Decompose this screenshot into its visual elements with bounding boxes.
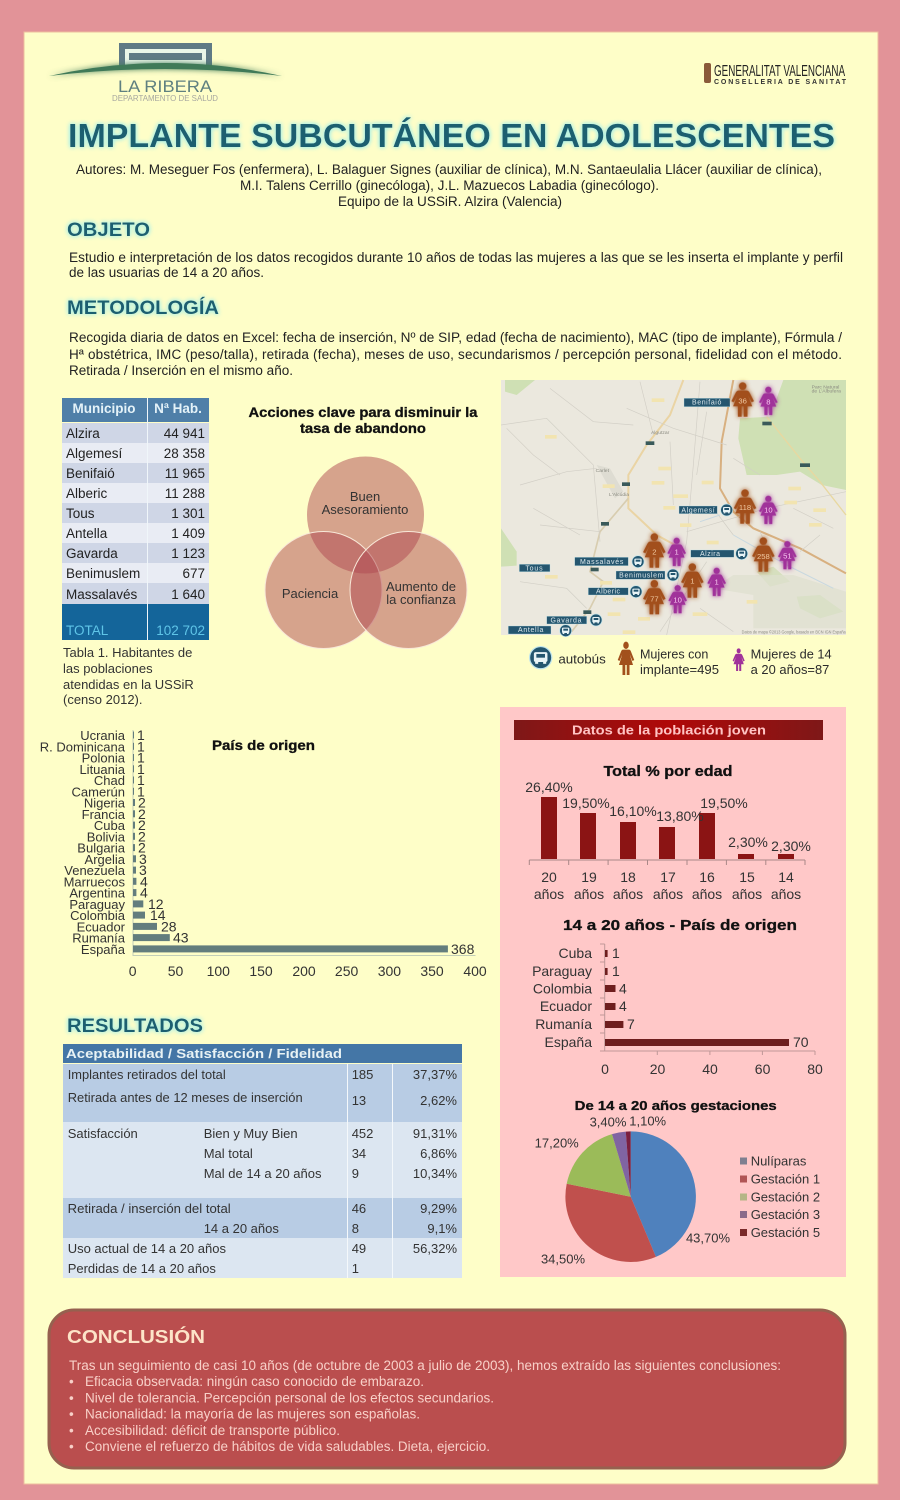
table: resultados: 46 xyxy=(352,1201,366,1216)
country labels: Ucrania xyxy=(80,728,126,743)
value labels: 1 xyxy=(137,750,145,766)
country labels: Marruecos xyxy=(64,874,125,889)
country labels: Bolivia xyxy=(87,829,126,844)
pie legend xyxy=(740,1154,820,1240)
chart: 14 a 20 años país de origen: 80 xyxy=(807,1061,823,1077)
country labels: España xyxy=(81,942,126,957)
venn diagram: Paciencia xyxy=(282,586,339,601)
x axis labels: 300 xyxy=(378,963,401,979)
map: Parc Natural xyxy=(812,384,839,390)
table: municipios: Benimuslem xyxy=(66,566,140,581)
country labels: Nigeria xyxy=(84,796,126,810)
venn diagram xyxy=(265,456,467,648)
chart: 14 a 20 años país de origen: 4 xyxy=(619,980,627,996)
country labels: Argentina xyxy=(69,886,126,901)
table: resultados: 6,86% xyxy=(420,1146,457,1161)
map: Benimuslem xyxy=(619,572,664,579)
icon: bus xyxy=(530,647,552,669)
logo: La Ribera xyxy=(49,43,282,103)
table caption: atendidas en la USSiR xyxy=(63,677,194,692)
chart: total por edad xyxy=(525,764,811,902)
chart: 14 a 20 años país de origen: 1 xyxy=(612,963,620,979)
chart: 14 a 20 años país de origen: 40 xyxy=(702,1061,718,1077)
text: objeto: de las usuarias de 14 a 20 años. xyxy=(69,265,264,280)
country labels: Francia xyxy=(82,807,126,822)
conclusion text xyxy=(69,1358,781,1454)
chart: total por edad: 2,30% xyxy=(771,838,811,854)
panel header xyxy=(514,720,823,740)
table: resultados: Uso actual de 14 a 20 años xyxy=(68,1241,226,1256)
panel header: Datos de la población joven xyxy=(572,722,766,738)
conclusion text: • xyxy=(69,1406,74,1422)
logo: La Ribera: DEPARTAMENTO DE SALUD xyxy=(112,94,218,103)
chart: gestaciones pie xyxy=(535,1098,820,1266)
table: municipios: 1 409 xyxy=(171,526,205,541)
chart: total por edad: 17 xyxy=(660,869,676,885)
map: 1 xyxy=(675,548,679,557)
table: resultados: 13 xyxy=(352,1093,366,1108)
map: Datos de mapa ©2013 Google, basado en BCN IGN España xyxy=(742,628,846,635)
chart: 14 a 20 años país de origen: 7 xyxy=(627,1016,635,1032)
chart: 14 a 20 años país de origen: España xyxy=(545,1034,592,1050)
logo: La Ribera: LA RIBERA xyxy=(118,77,213,96)
map: Carlet xyxy=(596,468,610,474)
icon: woman 14 to 20 xyxy=(733,648,745,671)
table: resultados: 2,62% xyxy=(420,1093,457,1108)
country labels: Polonia xyxy=(82,750,126,766)
conclusion text: Tras un seguimiento de casi 10 años (de octubre de 2003 a julio de 2003), hemos extraído las siguientes conclusiones: xyxy=(69,1358,781,1373)
chart: total por edad: 20 xyxy=(541,869,557,885)
authors: Autores: M. Meseguer Fos (enfermera), L. Balaguer Signes (auxiliar de clínica), M.N. Santaeulalia Llácer (auxiliar de clínica), xyxy=(76,162,822,177)
chart: 14 a 20 años país de origen: Cuba xyxy=(559,945,592,961)
map: 1 xyxy=(715,578,719,587)
map: 10 xyxy=(673,595,682,604)
table: resultados: 1 xyxy=(352,1261,359,1276)
text: metodología xyxy=(69,330,842,378)
conclusion text: Eficacia observada: ningún caso conocido de embarazo. xyxy=(85,1374,424,1389)
chart: total por edad: 19,50% xyxy=(562,795,610,811)
map: 10 xyxy=(764,505,773,514)
value labels: 2 xyxy=(138,794,146,810)
value labels: 3 xyxy=(139,851,147,867)
chart: total por edad: años xyxy=(574,886,604,902)
table: municipios: Nª Hab. xyxy=(154,401,202,416)
value labels: 4 xyxy=(140,873,148,889)
table: municipios: 44 941 xyxy=(164,426,205,441)
table: resultados: Satisfacción xyxy=(68,1126,138,1141)
table: municipios: Antella xyxy=(66,526,108,541)
heading: acciones clave: tasa de abandono xyxy=(300,421,426,436)
table caption: las poblaciones xyxy=(63,661,153,676)
conclusion text: • xyxy=(69,1423,74,1438)
value labels: 2 xyxy=(138,828,146,844)
chart: 14 a 20 años país de origen: Ecuador xyxy=(540,998,592,1014)
table: municipios: 1 123 xyxy=(171,546,205,561)
country labels: Bulgaria xyxy=(77,841,126,856)
venn diagram: Asesoramiento xyxy=(322,502,408,517)
map: 2 xyxy=(652,548,656,557)
conclusion text: • xyxy=(69,1374,74,1389)
table: municipios: 11 288 xyxy=(165,486,205,501)
country labels: Paraguay xyxy=(69,897,125,912)
chart: total por edad: 15 xyxy=(739,869,755,885)
chart: total por edad: Total % por edad xyxy=(604,764,732,780)
heading: objeto: OBJETO xyxy=(67,219,150,241)
x axis labels: 350 xyxy=(420,963,444,979)
table caption: (censo 2012). xyxy=(63,692,142,707)
value labels: 1 xyxy=(137,727,145,743)
chart: total por edad: 16,10% xyxy=(609,803,657,819)
chart: total por edad: 18 xyxy=(620,869,636,885)
chart: total por edad: 16 xyxy=(699,869,715,885)
x axis labels: 0 xyxy=(129,963,137,979)
chart: total por edad: 19 xyxy=(581,869,597,885)
country labels: R. Dominicana xyxy=(40,739,126,754)
map: Algutzar xyxy=(651,430,670,436)
value labels: 1 xyxy=(137,761,145,777)
chart: 14 a 20 años país de origen: 60 xyxy=(755,1061,771,1077)
value labels: 1 xyxy=(137,772,145,788)
conclusion text: Nacionalidad: la mayoría de las mujeres son españolas. xyxy=(85,1406,420,1422)
chart: total por edad: 2,30% xyxy=(728,834,768,850)
icon: woman with implant xyxy=(618,642,634,675)
text: metodología: Hª obstétrica, IMC (peso/talla), retirada (fecha), meses de uso, secundarismos / percepción personal, fidelidad con el método. xyxy=(69,347,842,362)
x axis labels: 200 xyxy=(292,963,316,979)
x axis labels: 100 xyxy=(207,963,230,979)
chart: país de origen xyxy=(40,727,487,979)
map xyxy=(501,380,846,637)
chart: 14 a 20 años país de origen xyxy=(532,917,823,1077)
chart: 14 a 20 años país de origen: 70 xyxy=(793,1034,809,1050)
chart: 14 a 20 años país de origen: Rumanía xyxy=(535,1016,592,1032)
table: resultados: 91,31% xyxy=(413,1126,457,1141)
chart: total por edad: años xyxy=(771,886,801,902)
chart: 14 a 20 años país de origen: Colombia xyxy=(533,980,592,996)
table: resultados: 185 xyxy=(352,1067,373,1082)
map: de L'Albufera xyxy=(812,388,841,394)
table caption xyxy=(63,645,194,707)
table: resultados: Bien y Muy Bien xyxy=(204,1126,298,1141)
pie legend: Gestación 5 xyxy=(751,1225,820,1240)
table: municipios: Alberic xyxy=(66,486,108,501)
map: 77 xyxy=(650,594,659,603)
bars xyxy=(133,732,448,952)
map: Algemesí xyxy=(681,507,715,514)
value labels: 14 xyxy=(150,907,166,923)
value labels: 12 xyxy=(148,896,164,912)
map: Massalavés xyxy=(580,559,624,566)
chart: total por edad: 14 xyxy=(778,869,794,885)
table: resultados: Retirada / inserción del total xyxy=(68,1201,231,1216)
country labels xyxy=(40,728,126,957)
chart: 14 a 20 años país de origen: 14 a 20 años - País de origen xyxy=(563,917,797,934)
map legend xyxy=(530,642,832,677)
table: resultados: 9,1% xyxy=(427,1221,457,1236)
text: objeto xyxy=(69,250,843,280)
table: resultados: 49 xyxy=(352,1241,366,1256)
chart: 14 a 20 años país de origen: 0 xyxy=(601,1061,609,1077)
conclusion text: Nivel de tolerancia. Percepción personal de los efectos secundarios. xyxy=(85,1390,494,1406)
map: 1 xyxy=(690,577,694,586)
table: resultados: 56,32% xyxy=(413,1241,457,1256)
chart: total por edad: 19,50% xyxy=(700,795,748,811)
value labels: 1 xyxy=(137,738,145,754)
table: resultados: Mal de 14 a 20 años xyxy=(204,1166,322,1181)
chart: total por edad: años xyxy=(732,886,762,902)
table: municipios: Gavarda xyxy=(66,546,118,561)
chart: gestaciones pie: 43,70% xyxy=(686,1230,730,1246)
table: municipios: Massalavés xyxy=(66,587,138,602)
table: resultados: 9,29% xyxy=(420,1201,457,1216)
value labels: 2 xyxy=(138,806,146,822)
country labels: Chad xyxy=(94,773,125,788)
map legend: implante=495 xyxy=(640,662,719,677)
panel: datos de la población joven xyxy=(500,707,846,1277)
table: resultados: Aceptabilidad / Satisfacción / Fidelidad xyxy=(66,1046,342,1061)
table: municipios: 11 965 xyxy=(165,466,205,481)
map: Alberic xyxy=(596,589,620,596)
chart: total por edad: 26,40% xyxy=(525,779,573,795)
table: resultados: 14 a 20 años xyxy=(204,1221,279,1236)
table: municipios: Algemesí xyxy=(66,446,123,461)
heading: acciones clave: Acciones clave para disminuir la xyxy=(248,405,478,420)
map: 118 xyxy=(739,503,751,512)
country labels: Rumanía xyxy=(72,931,126,946)
pie legend: Gestación 3 xyxy=(751,1207,820,1222)
conclusion text: Conviene el refuerzo de hábitos de vida saludables. Dieta, ejercicio. xyxy=(85,1439,490,1454)
pie legend: Gestación 2 xyxy=(751,1190,820,1204)
authors xyxy=(76,162,822,209)
value labels xyxy=(137,727,475,957)
value labels: 1 xyxy=(137,783,145,799)
chart: gestaciones pie: 17,20% xyxy=(535,1136,579,1150)
chart: total por edad: 13,80% xyxy=(656,808,704,824)
map: 36 xyxy=(738,396,747,405)
table: municipios: 677 xyxy=(182,566,205,581)
country labels: Argelia xyxy=(85,852,126,867)
heading: metodología: METODOLOGÍA xyxy=(67,296,219,319)
venn diagram: Aumento de xyxy=(386,579,456,594)
x axis labels: 400 xyxy=(463,963,487,979)
venn diagram: la confianza xyxy=(386,592,456,607)
x axis labels: 50 xyxy=(168,963,183,979)
map: 258 xyxy=(757,552,770,561)
country labels: Colombia xyxy=(70,908,126,923)
country labels: Venezuela xyxy=(64,863,126,878)
chart: total por edad: años xyxy=(613,886,643,902)
venn diagram: Buen xyxy=(350,489,380,504)
conclusion text: Accesibilidad: déficit de transporte público. xyxy=(85,1423,340,1438)
table: municipios: 1 640 xyxy=(171,587,205,602)
pie legend: Gestación 1 xyxy=(751,1172,820,1186)
country labels: Cuba xyxy=(94,818,126,833)
chart: 14 a 20 años país de origen: 20 xyxy=(650,1061,665,1077)
table: resultados: 9 xyxy=(352,1166,359,1181)
map legend: autobús xyxy=(558,652,606,667)
table: municipios: TOTAL xyxy=(66,623,109,638)
table caption: Tabla 1. Habitantes de xyxy=(63,645,192,660)
value labels: 2 xyxy=(138,840,146,856)
chart: total por edad: años xyxy=(692,886,722,902)
map legend: Mujeres con xyxy=(640,646,708,661)
value labels: 3 xyxy=(139,862,147,878)
chart: gestaciones pie: 1,10% xyxy=(629,1114,667,1128)
authors: Equipo de la USSiR. Alzira (Valencia) xyxy=(338,194,562,209)
logo: Generalitat Valenciana: CONSELLERIA DE SANITAT xyxy=(714,79,847,86)
conclusion text: • xyxy=(69,1439,74,1454)
chart title: País de origen xyxy=(212,738,315,753)
heading: acciones clave xyxy=(248,405,478,436)
pie legend: Nulíparas xyxy=(751,1154,807,1168)
x axis labels: 250 xyxy=(335,963,358,979)
table: resultados: Mal total xyxy=(204,1146,253,1161)
chart: total por edad: años xyxy=(653,886,683,902)
table: municipios: Alzira xyxy=(66,426,100,441)
map: Gavarda xyxy=(550,617,582,624)
table: resultados: 34 xyxy=(352,1146,366,1161)
conclusion text: • xyxy=(69,1390,74,1406)
table: municipios: Benifaió xyxy=(66,466,115,481)
chart: total por edad: años xyxy=(534,886,564,902)
table: municipios: Municipio xyxy=(72,401,136,416)
table: resultados: Retirada antes de 12 meses de inserción xyxy=(68,1090,303,1105)
chart: gestaciones pie: 34,50% xyxy=(541,1252,585,1266)
chart: gestaciones pie: 3,40% xyxy=(590,1114,627,1130)
table: municipios: 102 702 xyxy=(156,623,205,638)
table: municipios: 1 301 xyxy=(171,506,205,521)
chart: gestaciones pie: De 14 a 20 años gestaciones xyxy=(575,1098,777,1113)
map legend: a 20 años=87 xyxy=(751,662,829,677)
map: L'Alcúdia xyxy=(609,492,629,498)
logo: Generalitat Valenciana xyxy=(704,63,847,86)
map: 8 xyxy=(766,397,770,406)
text: metodología: Retirada / Inserción en el mismo año. xyxy=(69,363,293,378)
map: Benifaió xyxy=(692,400,721,407)
chart: 14 a 20 años país de origen: 4 xyxy=(619,998,627,1014)
table: resultados: 37,37% xyxy=(413,1067,457,1082)
table: resultados xyxy=(63,1044,462,1278)
value labels: 28 xyxy=(161,918,177,934)
x axis labels xyxy=(129,963,487,979)
map legend: Mujeres de 14 xyxy=(751,646,832,661)
authors: M.I. Talens Cerrillo (ginecóloga), J.L. Mazuecos Labadia (ginecólogo). xyxy=(240,178,659,193)
table: resultados: 10,34% xyxy=(413,1166,457,1181)
heading: conclusión: CONCLUSIÓN xyxy=(67,1326,205,1347)
value labels: 368 xyxy=(451,941,475,957)
table: municipios xyxy=(62,398,209,640)
map: Tous xyxy=(525,565,543,572)
heading: resultados: RESULTADOS xyxy=(67,1015,203,1037)
map: Antella xyxy=(518,627,543,634)
country labels: Ecuador xyxy=(77,919,126,934)
table: resultados: Implantes retirados del total xyxy=(68,1067,226,1082)
value labels: 2 xyxy=(138,817,146,833)
table: resultados: Perdidas de 14 a 20 años xyxy=(68,1261,216,1276)
title: IMPLANTE SUBCUTÁNEO EN ADOLESCENTES xyxy=(68,117,835,154)
chart: 14 a 20 años país de origen: Paraguay xyxy=(532,963,592,979)
country labels: Camerún xyxy=(72,784,125,799)
text: metodología: Recogida diaria de datos en Excel: fecha de inserción, Nº de SIP, edad (fecha de nacimiento), MAC (tipo de implante), Fórmula / xyxy=(69,330,842,345)
value labels: 43 xyxy=(173,930,189,946)
table: resultados: 452 xyxy=(352,1126,373,1141)
x axis labels: 150 xyxy=(249,963,273,979)
panel: conclusión xyxy=(49,1310,845,1468)
map: Alzira xyxy=(700,551,720,558)
text: objeto: Estudio e interpretación de los datos recogidos durante 10 años de todas las mujeres a las que se les inserta el implante y perfil xyxy=(69,250,843,265)
value labels: 4 xyxy=(140,885,148,901)
table: municipios: Tous xyxy=(66,506,95,521)
country labels: Lituania xyxy=(79,762,126,777)
chart: 14 a 20 años país de origen: 1 xyxy=(612,945,620,961)
map: 51 xyxy=(783,551,792,560)
table: resultados: 8 xyxy=(352,1221,359,1236)
table: municipios: 28 358 xyxy=(164,446,205,461)
